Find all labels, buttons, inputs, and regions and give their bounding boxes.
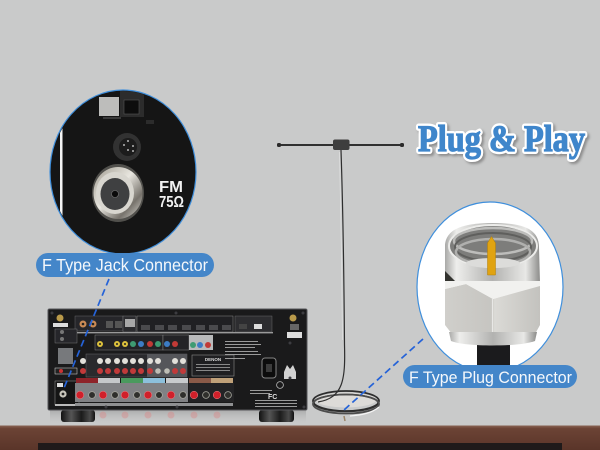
receiver body: [48, 309, 307, 410]
receiver feet: [61, 410, 294, 422]
dipole hub: [333, 140, 350, 150]
jack close-up contents: [60, 91, 184, 222]
certification marks: [268, 365, 296, 401]
hex top band: [445, 281, 540, 299]
hex nut: [445, 284, 540, 334]
label: F Type Plug Connector: F Type Plug Connector: [409, 368, 572, 387]
AV receiver: [48, 309, 307, 425]
AC inlet: [262, 358, 276, 378]
left side ports: [55, 329, 79, 406]
round multi-pin port: [113, 133, 141, 161]
callout: plug close-up: [417, 202, 563, 375]
gold pin: [488, 236, 496, 275]
antenna posts: [53, 314, 302, 338]
dashed leader: jack to receiver: [64, 279, 109, 388]
FM antenna: [277, 140, 404, 421]
video input row: [95, 335, 213, 350]
FM 75 ohm marking: 75Ω: [159, 194, 184, 211]
fine print: [225, 341, 297, 407]
receiver reflection: [50, 410, 306, 425]
speaker terminals: [75, 383, 234, 406]
lower collar: [449, 332, 537, 346]
dashed leader: plug to antenna end: [344, 339, 423, 410]
DENON label plate: [192, 355, 234, 376]
analog RCA jacks: [80, 354, 187, 377]
switch: [99, 90, 154, 124]
callout: jack close-up: [50, 90, 196, 258]
threaded collar: [445, 223, 540, 283]
top connector row: [75, 316, 273, 333]
label: F Type Jack Connector: F Type Jack Connector: [42, 255, 208, 275]
wooden table: [0, 426, 600, 450]
F type jack nut: [92, 164, 144, 222]
collar shadow notches: [445, 271, 455, 281]
chassis screws: [50, 312, 306, 408]
F type plug: [445, 223, 540, 375]
FM 75 ohm marking: FM: [159, 179, 183, 196]
cable highlight: [340, 152, 342, 340]
coiled cable: [313, 391, 379, 421]
dipole bar: [278, 144, 403, 146]
DENON label plate: DENON: [205, 357, 221, 362]
FM 75 ohm marking: [160, 181, 184, 207]
dipole end caps: [277, 143, 404, 147]
cable: [477, 345, 510, 365]
chassis edge line: [60, 128, 62, 216]
antenna cable: [318, 150, 345, 402]
collar interior threads: [449, 225, 537, 268]
speaker terminal labels: [76, 378, 233, 383]
certification marks: FC: [268, 394, 277, 401]
